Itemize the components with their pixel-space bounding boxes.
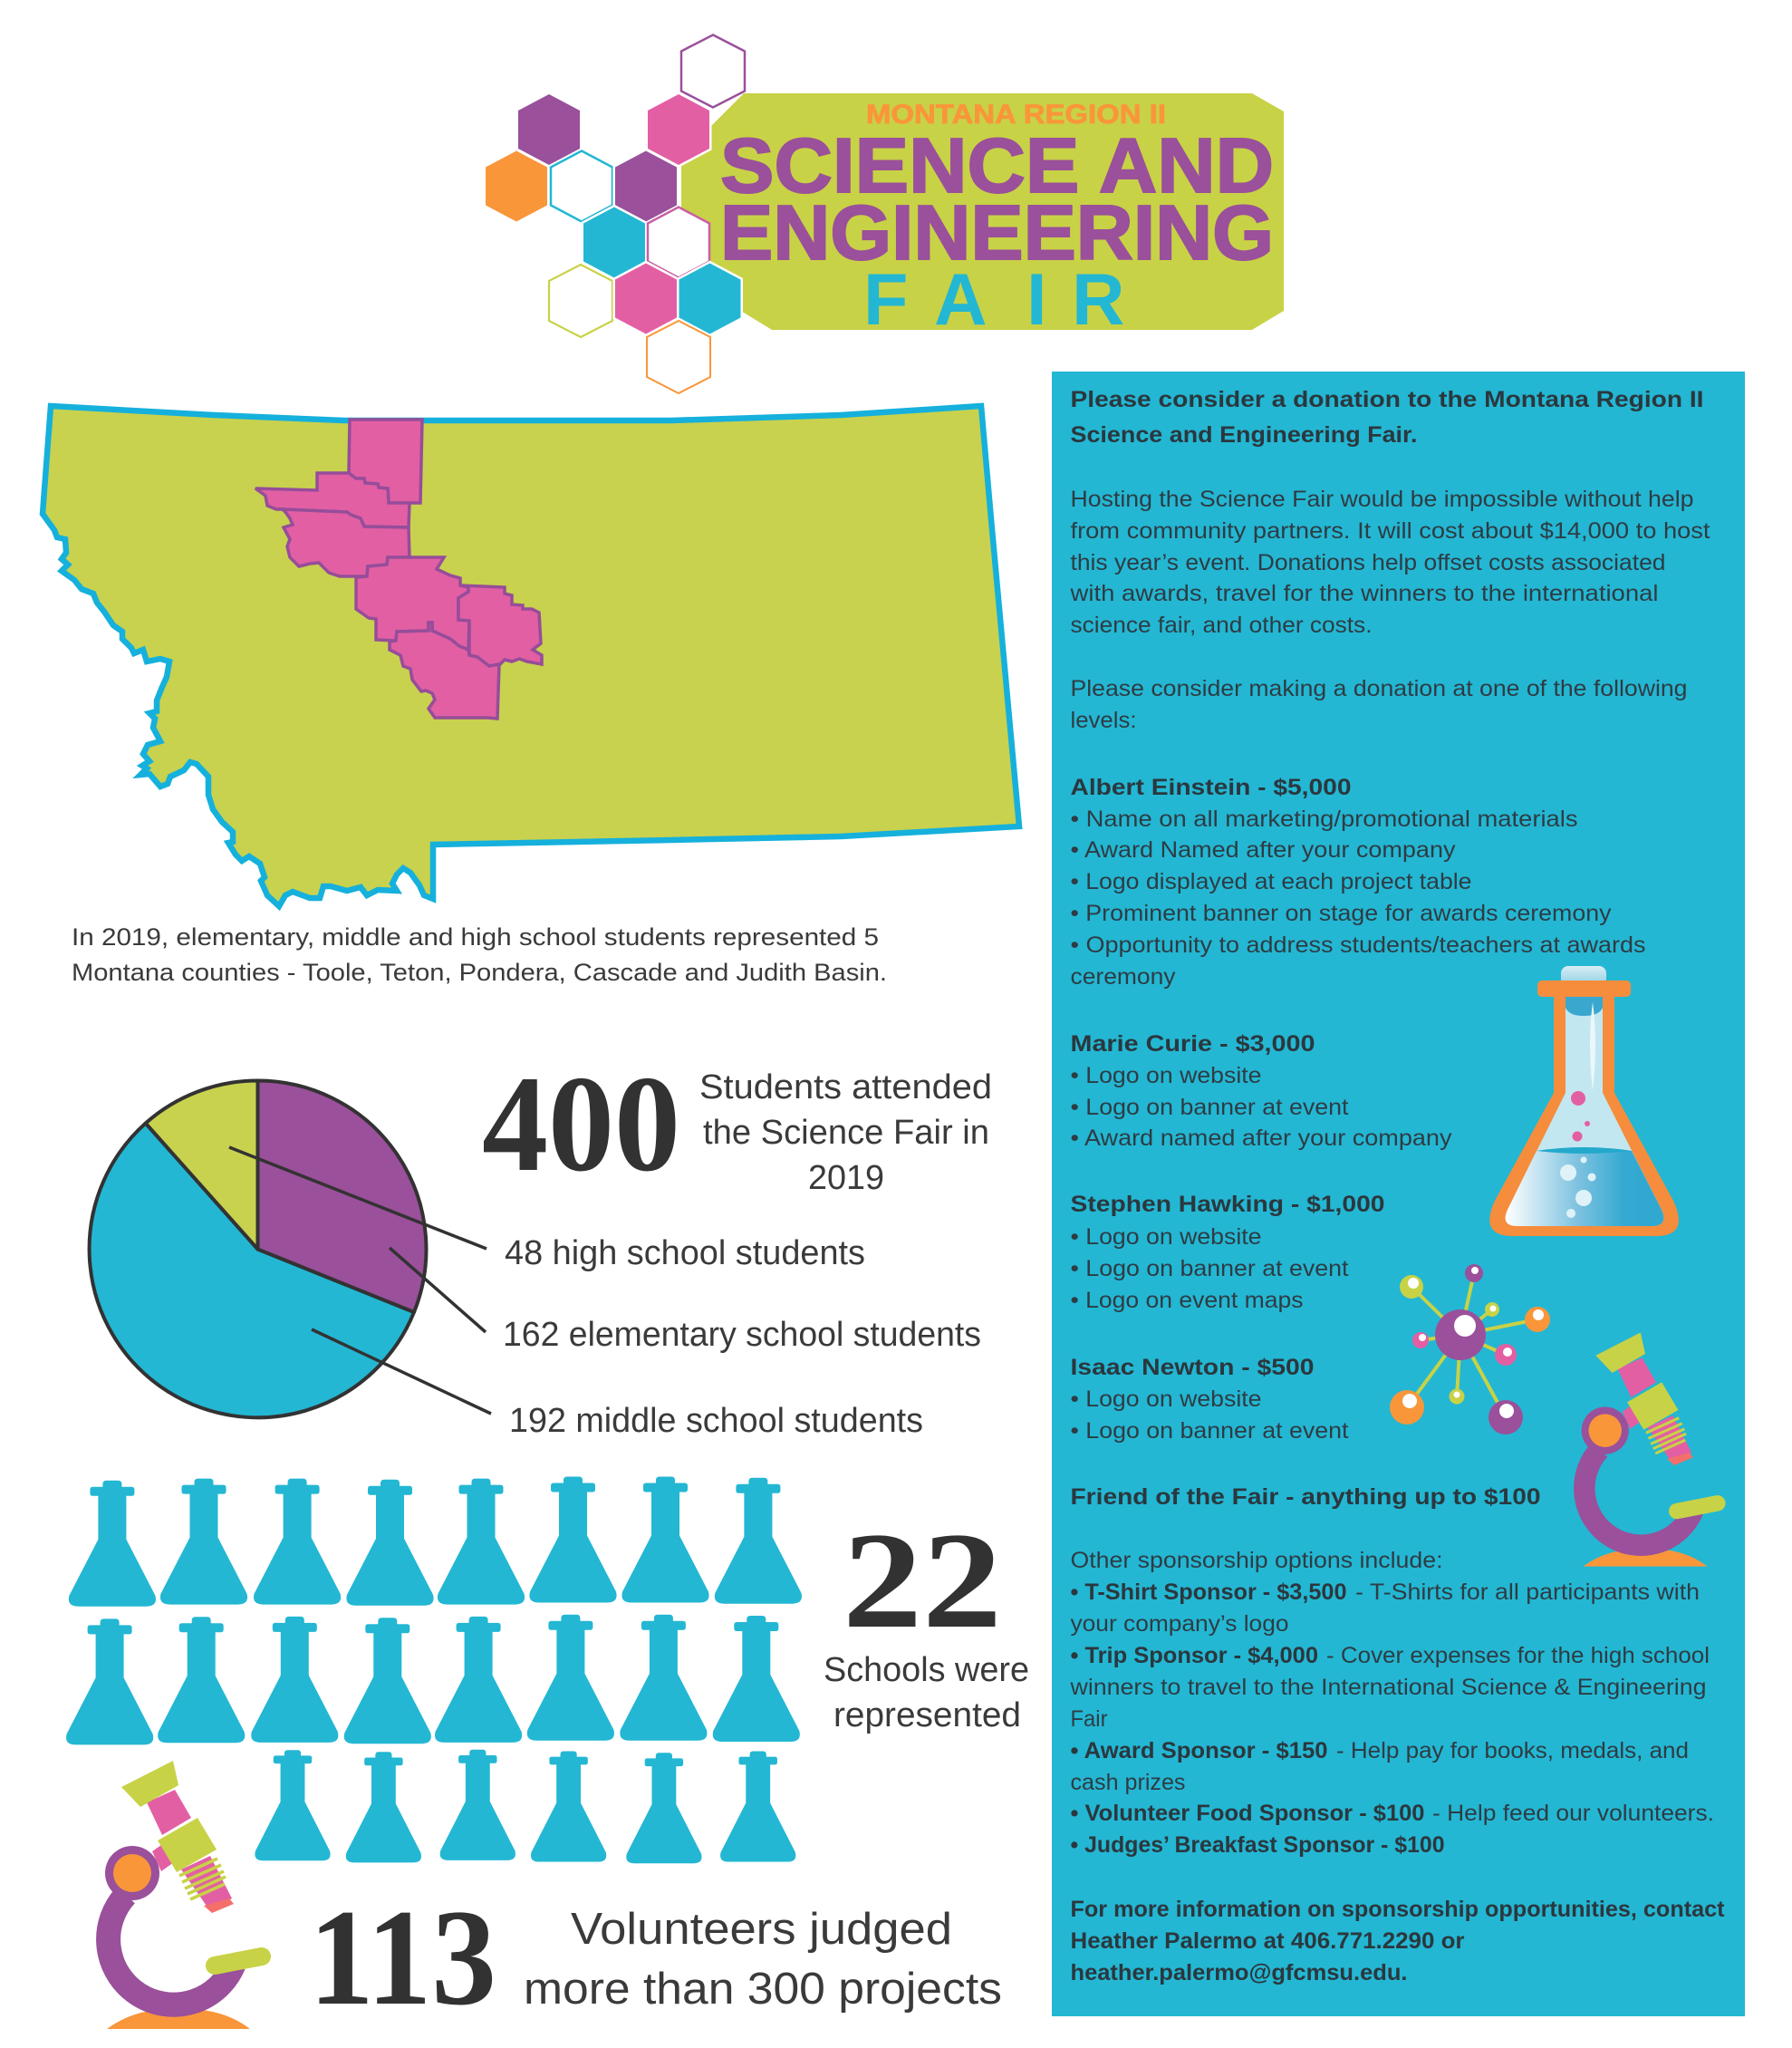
level: Albert Einstein: • Opportunity to address students/teachers at awards xyxy=(1071,932,1645,958)
stat text: students attended: 2019 xyxy=(808,1159,884,1197)
level: Albert Einstein xyxy=(1071,775,1645,990)
stat: 113: 113 xyxy=(309,1881,496,2034)
other sponsorship options: - Cover expenses for the high school xyxy=(1326,1643,1710,1668)
heading: donation: Please consider a donation to the Montana Region II xyxy=(1071,387,1703,412)
stat text: volunteers xyxy=(524,1905,1002,2014)
other sponsorship options: Other sponsorship options include: xyxy=(1071,1548,1442,1573)
contact information: heather.palermo@gfcmsu.edu. xyxy=(1071,1960,1408,1985)
other sponsorship options: • Trip Sponsor - $4,000 xyxy=(1071,1643,1318,1668)
counties highlighted xyxy=(255,420,542,719)
state outline xyxy=(43,406,1019,906)
map caption: Montana counties - Toole, Teton, Pondera, Cascade and Judith Basin. xyxy=(72,959,887,986)
logo xyxy=(486,34,1284,393)
other sponsorship options: - Help pay for books, medals, and xyxy=(1336,1738,1689,1763)
stat text: schools xyxy=(824,1651,1029,1734)
slice: high school xyxy=(146,1080,257,1249)
icon: microscope in panel xyxy=(1582,1332,1718,1567)
level: Stephen Hawking xyxy=(1071,1192,1384,1313)
map caption: In 2019, elementary, middle and high school students represented 5 xyxy=(72,923,879,951)
other sponsorship options: • Volunteer Food Sponsor - $100 xyxy=(1071,1801,1424,1826)
other sponsorship options: Fair xyxy=(1071,1706,1107,1732)
stat text: volunteers: more than 300 projects xyxy=(524,1965,1002,2014)
pie label: high school: 48 high school students xyxy=(505,1234,865,1272)
map of Montana xyxy=(43,406,1019,906)
other sponsorship options: • T-Shirt Sponsor - $3,500 xyxy=(1071,1579,1346,1605)
stat: 22: 22 xyxy=(843,1504,1002,1657)
other sponsorship options: your company’s logo xyxy=(1071,1611,1288,1637)
slice: middle school xyxy=(90,1124,414,1417)
hexagon cluster xyxy=(486,34,745,393)
level: Albert Einstein: • Logo displayed at each project table xyxy=(1071,869,1471,894)
logo text: Science and: SCIENCE AND xyxy=(720,123,1274,209)
level: Marie Curie: • Logo on banner at event xyxy=(1071,1095,1349,1120)
other sponsorship options: cash prizes xyxy=(1071,1770,1185,1795)
level: Albert Einstein: • Name on all marketing/promotional materials xyxy=(1071,807,1578,832)
level: Marie Curie xyxy=(1071,1031,1452,1151)
flask pictogram row 2 xyxy=(66,1615,800,1744)
flask pictogram row 3 xyxy=(255,1750,795,1863)
level: Stephen Hawking: • Logo on banner at event xyxy=(1071,1256,1349,1281)
icon: molecule xyxy=(1390,1264,1550,1435)
other sponsorship options: - T-Shirts for all participants with xyxy=(1355,1579,1700,1605)
level: Isaac Newton xyxy=(1071,1355,1349,1444)
levels intro: levels: xyxy=(1071,708,1136,733)
leader lines xyxy=(229,1147,491,1414)
intro paragraph: from community partners. It will cost about $14,000 to host xyxy=(1071,518,1710,544)
heading: donation: Science and Engineering Fair. xyxy=(1071,422,1417,448)
other sponsorship options: - Help feed our volunteers. xyxy=(1432,1801,1714,1826)
level: Marie Curie: • Award named after your company xyxy=(1071,1125,1452,1151)
level: Friend of the Fair: Friend of the Fair - anything up to $100 xyxy=(1071,1484,1540,1510)
intro paragraph: this year’s event. Donations help offset costs associated xyxy=(1071,550,1665,575)
slice: elementary xyxy=(257,1080,426,1312)
panel background xyxy=(1052,372,1745,2016)
intro paragraph: science fair, and other costs. xyxy=(1071,613,1372,638)
intro paragraph: with awards, travel for the winners to the international xyxy=(1069,581,1658,606)
other sponsorship options: • Award Sponsor - $150 xyxy=(1071,1738,1328,1763)
heading: donation xyxy=(1071,387,1703,448)
level: Albert Einstein: • Prominent banner on stage for awards ceremony xyxy=(1071,901,1612,926)
icon: erlenmeyer flask xyxy=(1489,966,1679,1236)
level: Albert Einstein: ceremony xyxy=(1071,964,1176,990)
other sponsorship options: winners to travel to the International Science & Engineering xyxy=(1069,1675,1707,1700)
stat: 400: 400 xyxy=(482,1048,680,1200)
level: Albert Einstein: Albert Einstein - $5,000 xyxy=(1071,775,1352,800)
stat text: schools: represented xyxy=(833,1696,1021,1734)
stat text: students attended: the Science Fair in xyxy=(703,1114,989,1152)
intro paragraph xyxy=(1069,487,1710,638)
logo background plate xyxy=(681,93,1284,330)
level: Stephen Hawking: • Logo on event maps xyxy=(1071,1288,1303,1313)
flask pictogram row 1 xyxy=(69,1477,802,1607)
logo text: Fair: FAIR xyxy=(863,259,1125,341)
intro paragraph: Hosting the Science Fair would be impossible without help xyxy=(1071,487,1694,512)
pie chart xyxy=(90,1080,426,1417)
contact information xyxy=(1071,1897,1725,1985)
levels intro: Please consider making a donation at one of the following xyxy=(1071,676,1687,701)
level: Marie Curie: • Logo on website xyxy=(1071,1063,1261,1088)
map caption xyxy=(72,923,887,986)
logo text: Montana Region II: MONTANA REGION II xyxy=(866,100,1166,130)
pie label: elementary: 162 elementary school students xyxy=(503,1316,981,1354)
level: Albert Einstein: • Award Named after your company xyxy=(1071,837,1456,863)
other sponsorship options: • Judges’ Breakfast Sponsor - $100 xyxy=(1071,1832,1444,1858)
level: Stephen Hawking: Stephen Hawking - $1,000 xyxy=(1071,1192,1384,1217)
stat text: schools: Schools were xyxy=(824,1651,1029,1689)
panel: donation xyxy=(1052,372,1745,2016)
level: Isaac Newton: • Logo on website xyxy=(1071,1386,1261,1412)
stat text: students attended: Students attended xyxy=(699,1068,992,1106)
level: Isaac Newton: • Logo on banner at event xyxy=(1071,1418,1349,1444)
level: Isaac Newton: Isaac Newton - $500 xyxy=(1071,1355,1314,1380)
logo text: Engineering: ENGINEERING xyxy=(720,190,1274,276)
levels intro xyxy=(1071,676,1687,733)
stat text: volunteers: Volunteers judged xyxy=(571,1905,952,1954)
pie label: middle school: 192 middle school students xyxy=(509,1402,923,1440)
icon: microscope xyxy=(105,1761,262,2029)
level: Marie Curie: Marie Curie - $3,000 xyxy=(1071,1031,1315,1057)
contact information: Heather Palermo at 406.771.2290 or xyxy=(1071,1928,1465,1954)
contact information: For more information on sponsorship opportunities, contact xyxy=(1071,1897,1725,1922)
stat text: students attended xyxy=(699,1068,992,1197)
other sponsorship options xyxy=(1069,1548,1714,1858)
level: Stephen Hawking: • Logo on website xyxy=(1071,1224,1261,1250)
